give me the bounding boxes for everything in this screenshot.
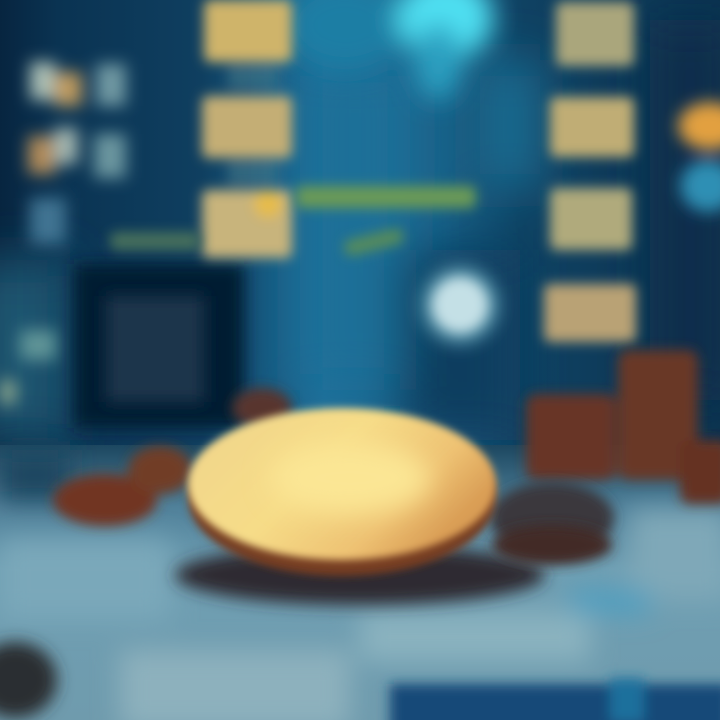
brown coin stacks, left [53, 388, 292, 526]
dark object, lower left corner [0, 642, 57, 718]
background wall [0, 0, 720, 470]
white glowing circle [420, 265, 500, 345]
top light glow [285, 0, 493, 100]
large gold coin [188, 408, 496, 576]
brown coin stacks, right [526, 350, 720, 504]
yellow panels, centre-left column [202, 0, 292, 258]
yellow panels, right column [544, 2, 636, 342]
orange and cyan icon at right edge [678, 102, 720, 212]
floor [0, 445, 720, 720]
green trend line [110, 186, 476, 257]
dark navy lower edge panel [390, 678, 720, 720]
left column of small figures [0, 62, 126, 404]
dark coin shadow and grey stack [175, 482, 614, 605]
dark square panel [74, 264, 244, 428]
